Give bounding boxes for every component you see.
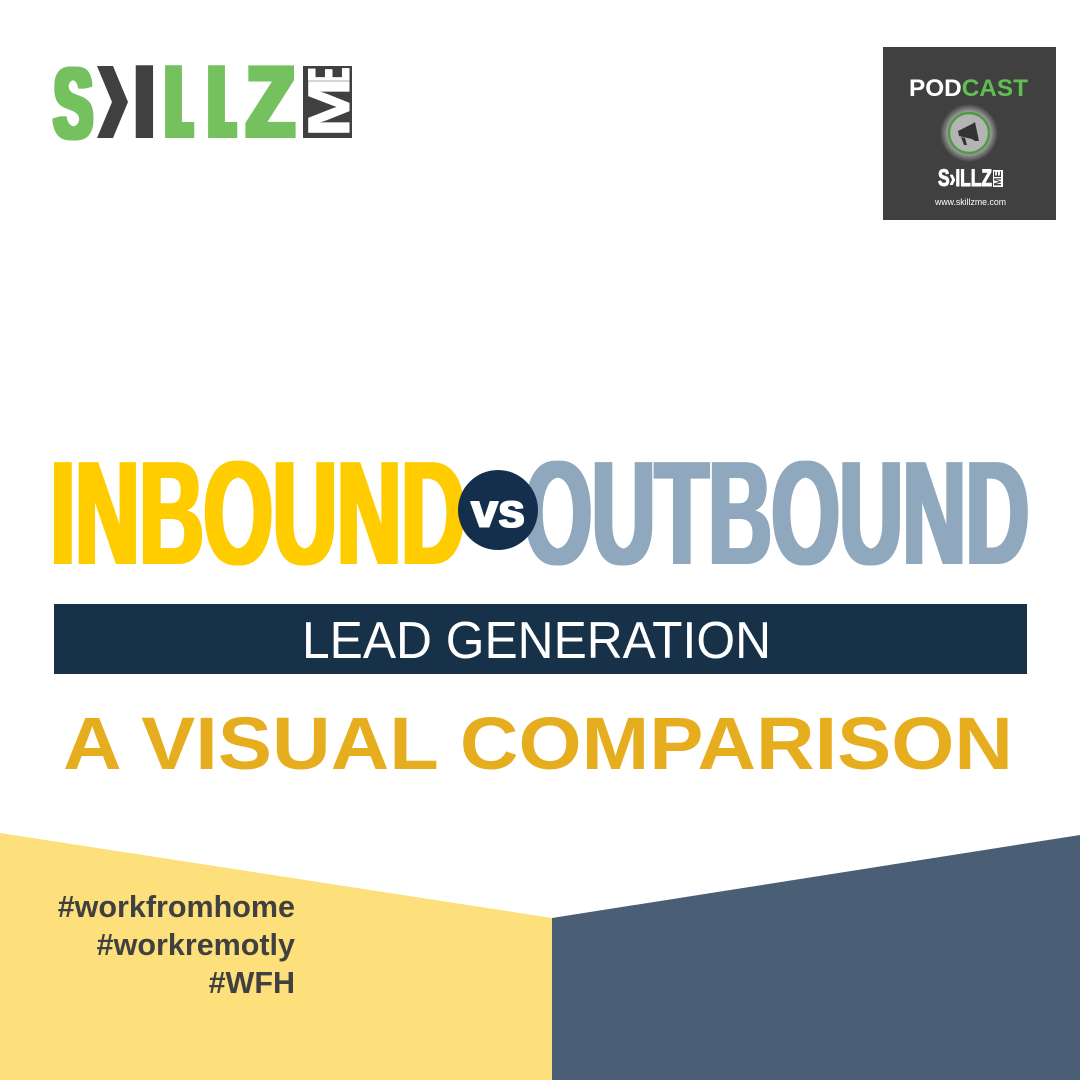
mini logo: ME bbox=[993, 171, 1004, 186]
hashtags: #workremotly bbox=[97, 928, 295, 962]
hashtags: #WFH bbox=[209, 966, 295, 1000]
mini logo: S›ILLZ bbox=[938, 165, 992, 192]
banner: lead generation bbox=[54, 604, 1027, 674]
vs badge bbox=[458, 470, 538, 550]
navy corner panel bbox=[552, 835, 1080, 1080]
logo: SkillzME: M bbox=[297, 77, 362, 137]
podcast heading: PODCAST bbox=[909, 75, 1028, 102]
hashtags bbox=[58, 890, 295, 1000]
subtitle: a visual comparison: A VISUAL COMPARISON bbox=[63, 702, 1013, 785]
logo: SkillzME: L bbox=[169, 47, 189, 157]
logo: SkillzME: E bbox=[297, 68, 362, 82]
yellow corner panel bbox=[0, 833, 552, 1080]
website url: www.skillzme.com bbox=[934, 197, 1006, 207]
logo: SkillzME: S bbox=[54, 48, 93, 160]
banner: lead generation: LEAD GENERATION bbox=[302, 612, 771, 670]
logo: SkillzME: Z bbox=[246, 47, 295, 157]
logo: SkillzME: L bbox=[212, 47, 232, 157]
logo: SkillzME bbox=[54, 47, 362, 160]
title: inbound: INBOUND bbox=[50, 431, 465, 596]
logo: SkillzME: I bbox=[134, 47, 155, 157]
hashtags: #workfromhome bbox=[58, 890, 295, 924]
icon: megaphone bbox=[940, 104, 998, 162]
podcast badge bbox=[883, 47, 1056, 220]
vs badge: vs bbox=[471, 485, 525, 538]
